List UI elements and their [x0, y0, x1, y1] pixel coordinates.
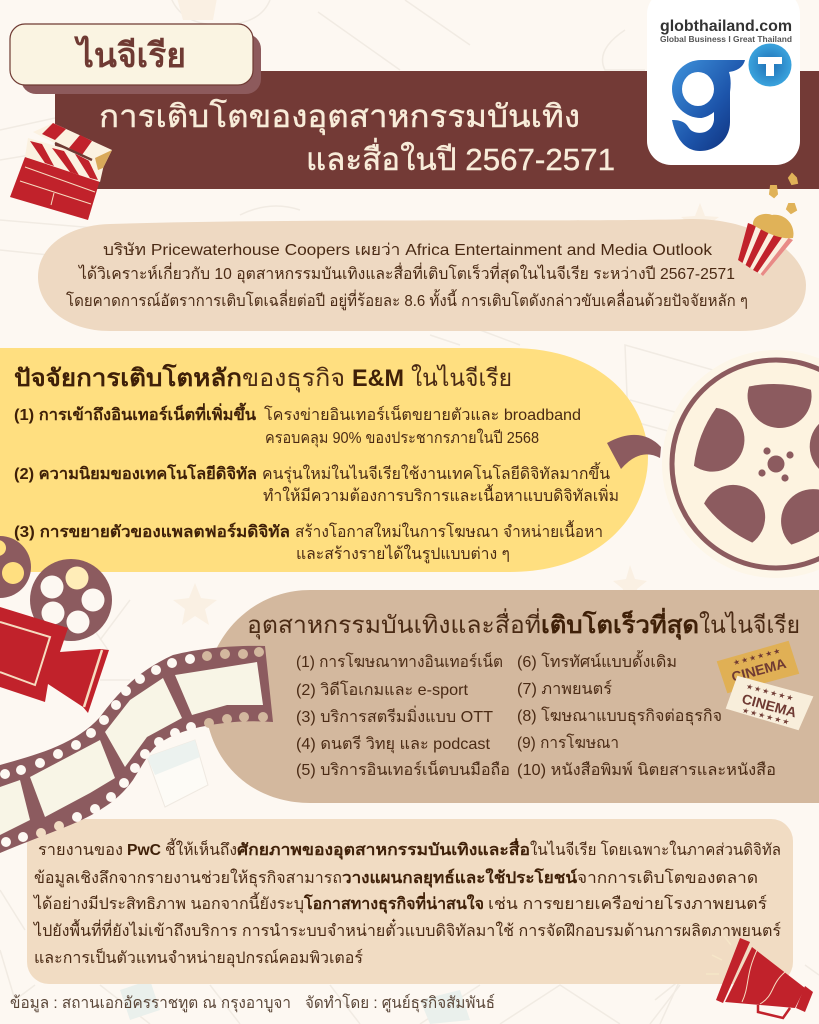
logo card — [647, 0, 800, 165]
heading: growth factors — [14, 363, 512, 393]
list: ranks 1 to 5: (3) บริการสตรีมมิ่งแบบ OTT — [296, 705, 493, 726]
country tag — [10, 24, 261, 94]
panel: growth factors — [0, 348, 648, 572]
title banner — [55, 71, 819, 189]
factor 3 — [14, 520, 603, 564]
icon: film strip — [0, 646, 273, 853]
list: ranks 6 to 10: (6) โทรทัศน์แบบดั้งเดิม — [517, 650, 677, 671]
factor 2: คนรุ่นใหม่ในไนจีเรียใช้งานเทคโนโลยีดิจิทัลมากขึ้น — [262, 462, 610, 484]
panel: introduction — [38, 219, 806, 331]
factor 1: ครอบคลุม 90% ของประชากรภายในปี 2568 — [265, 428, 539, 448]
summary line 3 — [32, 892, 767, 914]
factor 2: ทำให้มีความต้องการบริการและเนื้อหาแบบดิจิทัลเพิ่ม — [263, 484, 619, 505]
factor 1 — [14, 402, 581, 448]
title line 2: และสื่อในปี 2567-2571 — [306, 138, 615, 177]
factor 1: โครงข่ายอินเทอร์เน็ตขยายตัวและ broadband — [264, 404, 581, 424]
heading: fastest growing: ในไนจีเรีย — [699, 611, 800, 639]
panel: introduction: บริษัท Pricewaterhouse Coopers เผยว่า Africa Entertainment and Media Outlook — [103, 242, 713, 259]
icon: cinema tickets — [718, 642, 812, 729]
list: ranks 6 to 10: (7) ภาพยนตร์ — [517, 679, 612, 698]
summary line 1: รายงานของ — [38, 842, 123, 859]
heading: growth factors: E&M — [352, 365, 404, 392]
summary line 4: ไปยังพื้นที่ที่ยังไม่เข้าถึงบริการ การนำระบบจำหน่ายตั๋วแบบดิจิทัลมาใช้ การจัดฝึกอบรมด้านการผลิตภาพยนตร์ — [32, 918, 781, 940]
summary line 2: ข้อมูลเชิงลึกจากรายงานช่วยให้ธุรกิจสามารถ — [34, 868, 342, 888]
summary line 1: ชี้ให้เห็นถึง — [165, 838, 237, 859]
heading: fastest growing — [247, 607, 800, 641]
summary line 3: ได้อย่างมีประสิทธิภาพ นอกจากนี้ยังระบุ — [32, 892, 304, 914]
summary line 3: เช่น การขยายเครือข่ายโรงภาพยนตร์ — [488, 894, 767, 913]
summary line 3: โอกาสทางธุรกิจที่น่าสนใจ — [303, 892, 484, 914]
panel: introduction: ได้วิเคราะห์เกี่ยวกับ 10 อุตสาหกรรมบันเทิงและสื่อที่เติบโตเร็วที่สุดในไนจีเรีย ระหว่างปี 2567-2571 — [77, 262, 735, 284]
summary line 2 — [34, 867, 758, 888]
summary line 2: จากการเติบโตของตลาด — [577, 868, 758, 887]
heading: growth factors: ของธุรกิจ — [242, 365, 345, 393]
factor 2 — [14, 462, 619, 505]
icon: film reel — [607, 350, 819, 578]
panel: fastest growing industries — [205, 590, 819, 803]
factor 2: (2) ความนิยมของเทคโนโลยีดิจิทัล — [14, 463, 257, 483]
footer credits: ข้อมูล : สถานเอกอัครราชทูต ณ กรุงอาบูจา — [10, 994, 291, 1013]
list: ranks 1 to 5 — [296, 651, 510, 779]
icon: cinema tickets: ★ ★ ★ ★ ★ ★ — [741, 707, 790, 726]
icon: megaphone — [706, 936, 813, 1018]
icon: g mark — [672, 60, 745, 151]
list: ranks 6 to 10: (10) หนังสือพิมพ์ นิตยสารและหนังสือ — [517, 760, 776, 779]
summary line 2: วางแผนกลยุทธ์และใช้ประโยชน์ — [342, 867, 577, 888]
footer credits: จัดทำโดย : ศูนย์ธุรกิจสัมพันธ์ — [305, 993, 495, 1013]
icon: cinema tickets: ★ ★ ★ ★ ★ ★ — [733, 648, 781, 667]
panel: PwC report summary — [27, 819, 793, 984]
logo site name: globthailand.com — [660, 18, 792, 35]
list: ranks 1 to 5: (1) การโฆษณาทางอินเทอร์เน็ต — [296, 651, 503, 671]
icon: clapperboard — [10, 123, 112, 220]
list: ranks 1 to 5: (5) บริการอินเทอร์เน็ตบนมือถือ — [296, 759, 510, 779]
icon: T badge — [748, 44, 792, 86]
list: ranks 1 to 5: (4) ดนตรี วิทยุ และ podcast — [296, 735, 491, 754]
summary line 1: PwC — [127, 842, 161, 859]
factor 3: (3) การขยายตัวของแพลตฟอร์มดิจิทัล — [14, 522, 290, 541]
list: ranks 1 to 5: (2) วิดีโอเกมและ e-sport — [296, 680, 469, 699]
footer credits — [10, 993, 495, 1013]
logo tagline: Global Business I Great Thailand — [660, 35, 792, 44]
summary line 1: ในไนจีเรีย โดยเฉพาะในภาคส่วนดิจิทัล — [530, 840, 781, 859]
list: ranks 6 to 10: (8) โฆษณาแบบธุรกิจต่อธุรกิจ — [517, 706, 722, 726]
panel: introduction: โดยคาดการณ์อัตราการเติบโตเฉลี่ยต่อปี อยู่ที่ร้อยละ 8.6 ทั้งนี้ การเติบโตดังกล่าวขับเคลื่อนด้วยปัจจัยหลัก ๆ — [66, 289, 748, 311]
icon: popcorn — [738, 174, 797, 276]
heading: fastest growing: เติบโตเร็วที่สุด — [541, 607, 699, 641]
heading: growth factors: ปัจจัยการเติบโตหลัก — [14, 363, 242, 392]
title line 1: การเติบโตของอุตสาหกรรมบันเทิง — [99, 99, 580, 136]
summary line 1 — [38, 838, 781, 860]
summary line 5: และการเป็นตัวแทนจำหน่ายอุปกรณ์คอมพิวเตอร์ — [34, 947, 363, 968]
heading: growth factors: ในไนจีเรีย — [411, 364, 512, 392]
list: ranks 6 to 10 — [517, 650, 776, 779]
factor 3: สร้างโอกาสใหม่ในการโฆษณา จำหน่ายเนื้อหา — [295, 520, 603, 541]
icon: cinema tickets: ★ ★ ★ ★ ★ ★ — [745, 683, 794, 702]
icon: film projector — [0, 536, 112, 713]
summary line 1: ศักยภาพของอุตสาหกรรมบันเทิงและสื่อ — [237, 838, 530, 860]
list: ranks 6 to 10: (9) การโฆษณา — [517, 733, 619, 752]
icon: cinema tickets: CINEMA — [740, 690, 798, 720]
country tag: ไนจีเรีย — [74, 35, 186, 75]
icon: cinema tickets: CINEMA — [730, 655, 788, 685]
factor 1: (1) การเข้าถึงอินเทอร์เน็ตที่เพิ่มขึ้น — [14, 402, 256, 424]
heading: fastest growing: อุตสาหกรรมบันเทิงและสื่อที่ — [247, 608, 541, 640]
factor 3: และสร้างรายได้ในรูปแบบต่าง ๆ — [296, 544, 510, 564]
